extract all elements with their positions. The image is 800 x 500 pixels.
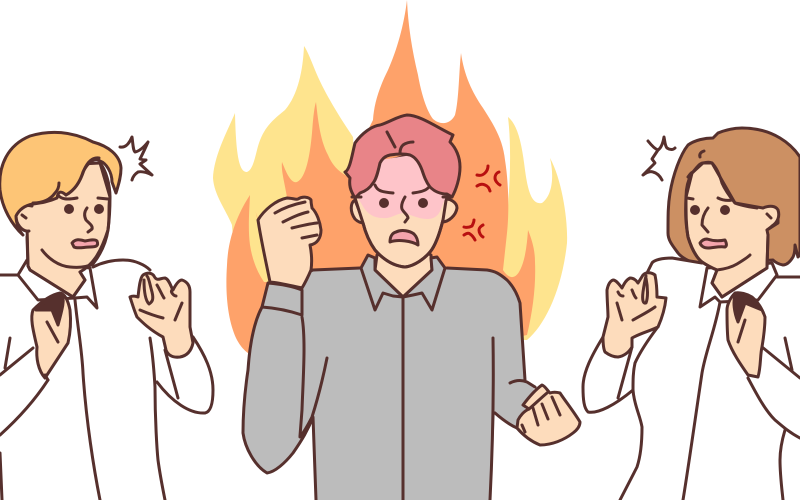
shirt outlines (0, 260, 213, 500)
shock mark left (120, 137, 152, 180)
neck and face outline (27, 163, 110, 297)
brows, nose (352, 185, 452, 222)
yellow sliver left of arm (249, 195, 270, 282)
hair (345, 115, 460, 198)
shirt body (583, 258, 800, 500)
raised fist (258, 197, 321, 288)
body shirt (0, 260, 213, 500)
ears (351, 199, 457, 223)
eyes (380, 200, 388, 206)
shirt lines (243, 268, 535, 500)
anger marks (464, 166, 500, 240)
yellow flame outer (213, 46, 567, 340)
body and sleeves (243, 268, 535, 500)
hair fringe (688, 151, 757, 208)
brows, nose (687, 198, 732, 232)
mouth (390, 231, 418, 245)
left person (0, 132, 213, 500)
lower fist (517, 385, 580, 445)
head and neck skin (25, 163, 110, 297)
orange flame (226, 0, 535, 356)
collar-clutching hand (32, 293, 71, 378)
right person (583, 128, 800, 500)
face (355, 155, 447, 267)
flames (213, 0, 567, 356)
ear (16, 205, 32, 231)
raised hand (603, 273, 666, 357)
clutching hand (727, 293, 765, 377)
neck (375, 240, 432, 297)
hair back (668, 128, 800, 265)
hair fringe (33, 158, 99, 203)
mouth (72, 240, 98, 248)
hair (0, 132, 121, 235)
ear (763, 206, 779, 230)
pink forehead and eye band (358, 155, 447, 219)
collar (361, 255, 445, 310)
collars (700, 263, 777, 307)
mouth (700, 239, 726, 248)
cuff (262, 283, 302, 315)
shirt outlines (583, 258, 800, 500)
face and neck skin (686, 163, 778, 297)
collar (18, 260, 97, 308)
shock mark right (643, 137, 675, 180)
face details (58, 195, 108, 232)
face outline (686, 173, 768, 297)
face outline (363, 220, 443, 267)
raised hand (130, 273, 193, 357)
center person (243, 115, 580, 500)
